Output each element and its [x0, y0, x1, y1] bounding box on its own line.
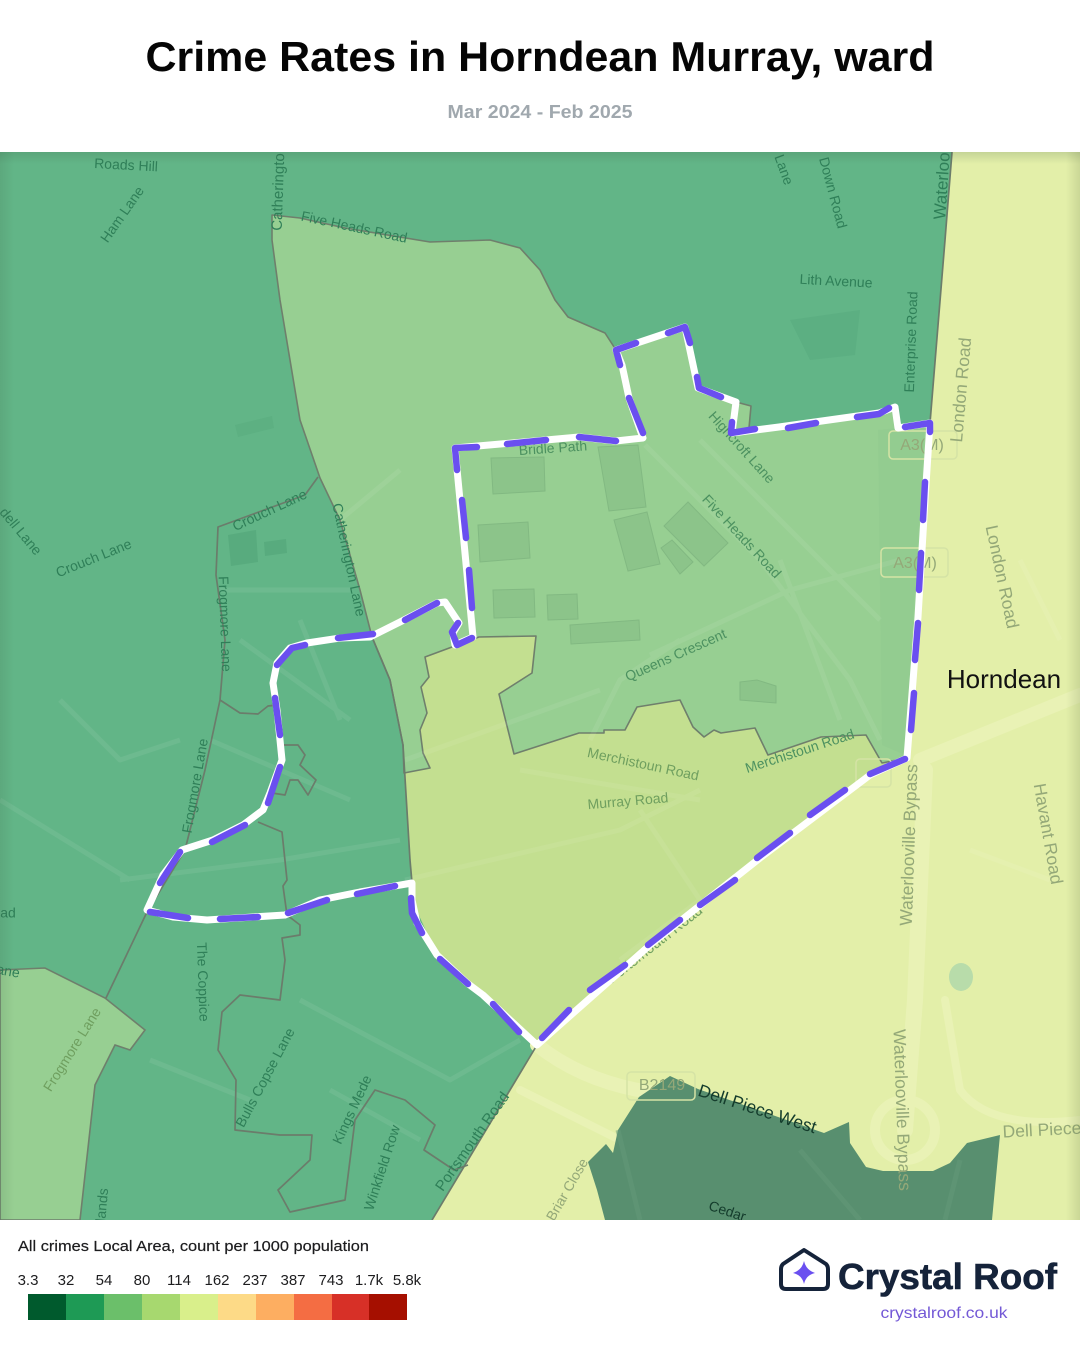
legend tick values: 80 — [134, 1272, 150, 1289]
area: yellow-green south-central — [404, 620, 907, 1045]
road labels: lands — [92, 1188, 111, 1222]
legend tick values: 237 — [242, 1272, 268, 1289]
road labels: Crouch Lane — [53, 535, 134, 580]
road labels: Waterlooville Bypass — [890, 1029, 915, 1191]
legend tick values: 54 — [96, 1272, 112, 1289]
road labels: Bulls Copse Lane — [232, 1025, 298, 1130]
road labels: Frogmore Lane — [179, 737, 211, 834]
local road network — [0, 518, 596, 1142]
area: pale yellow east — [432, 152, 1080, 1220]
road labels: Five Heads Road — [300, 208, 409, 246]
road labels: Lane — [771, 152, 797, 187]
road labels: London Road — [982, 523, 1023, 630]
road labels: Bridle Path — [518, 437, 588, 458]
road labels: London Road — [946, 337, 975, 443]
road labels: Ham Lane — [97, 183, 147, 245]
legend title: All crimes Local Area, count per 1000 population — [18, 1238, 369, 1255]
legend — [18, 1238, 422, 1320]
road labels: Frogmore Lane — [216, 576, 235, 672]
road labels: Frogmore Lane — [40, 1004, 104, 1094]
area: light green north ward — [272, 215, 930, 773]
road labels: B2149 — [639, 1077, 685, 1094]
road labels: A3(M) — [900, 437, 944, 454]
title: Crime Rates in Horndean Murray, ward — [146, 33, 934, 80]
road labels: Queens Crescent — [622, 625, 729, 684]
road labels: Kings Mede — [329, 1072, 375, 1146]
legend tick values: 114 — [167, 1272, 191, 1289]
road labels: Catheringto — [269, 153, 288, 231]
road labels: Down Road — [816, 155, 850, 230]
road labels: Roads Hill — [94, 155, 158, 174]
buildings — [478, 445, 776, 703]
area: dark green south — [588, 1076, 1000, 1220]
logo url: crystalroof.co.uk — [880, 1305, 1009, 1322]
road labels: Catherington Lane — [329, 502, 369, 618]
legend tick values: 743 — [318, 1272, 344, 1289]
road labels: Waterlooville Bypass — [896, 764, 921, 926]
road labels: Enterprise Road — [901, 291, 920, 393]
road shields — [627, 431, 957, 1100]
road labels: Dell Piece — [1002, 1118, 1080, 1142]
road labels: Dell Piece West — [696, 1080, 819, 1137]
legend colour scale — [28, 1294, 407, 1320]
legend tick values: 32 — [58, 1272, 74, 1289]
road labels: Murray Road — [587, 789, 669, 812]
wooded patches north — [790, 310, 860, 360]
legend tick values: 387 — [280, 1272, 306, 1289]
road labels: Briar Close — [543, 1155, 591, 1223]
road labels: Merchistoun Road — [586, 744, 701, 783]
road labels: ad — [0, 905, 16, 921]
choropleth map — [0, 152, 1080, 1224]
road labels: A3(M) — [893, 555, 937, 572]
pond — [949, 963, 973, 991]
road labels: Portsmouth Road — [603, 902, 706, 987]
road labels: Five Heads Road — [699, 491, 785, 581]
subtitle: date range: Mar 2024 - Feb 2025 — [448, 102, 632, 122]
road labels: Waterloo — [930, 152, 954, 220]
road labels: Merchistoun Road — [743, 726, 856, 776]
map edge vignette — [0, 152, 1080, 1220]
place label: Horndean: Horndean — [947, 664, 1061, 694]
sub-area boundaries — [106, 152, 952, 1220]
road labels: Lith Avenue — [799, 271, 873, 291]
road labels: Crouch Lane — [230, 486, 309, 534]
legend tick values: 3.3 — [18, 1272, 38, 1289]
area: light green south-west — [0, 968, 145, 1220]
area: darker strip along A3 — [878, 425, 925, 755]
road labels: Cedar — [707, 1197, 748, 1224]
icon: house with star — [781, 1250, 828, 1289]
major roads — [520, 695, 1080, 1160]
logo wordmark: Crystal Roof — [838, 1256, 1058, 1297]
road labels: Portsmouth Road — [432, 1089, 513, 1194]
road labels: Winkfield Row — [360, 1122, 403, 1212]
road labels — [0, 152, 1080, 1224]
road labels: The Coppice — [194, 942, 213, 1022]
legend tick values: 5.8k — [393, 1272, 422, 1289]
logo: Crystal Roof — [781, 1250, 1058, 1322]
road labels: Highcroft Lane — [706, 408, 779, 486]
road labels: Havant Road — [1030, 782, 1067, 886]
legend tick values — [18, 1272, 422, 1289]
legend tick values: 1.7k — [355, 1272, 384, 1289]
legend tick values: 162 — [204, 1272, 230, 1289]
ward boundary: Horndean Murray — [147, 327, 930, 1045]
